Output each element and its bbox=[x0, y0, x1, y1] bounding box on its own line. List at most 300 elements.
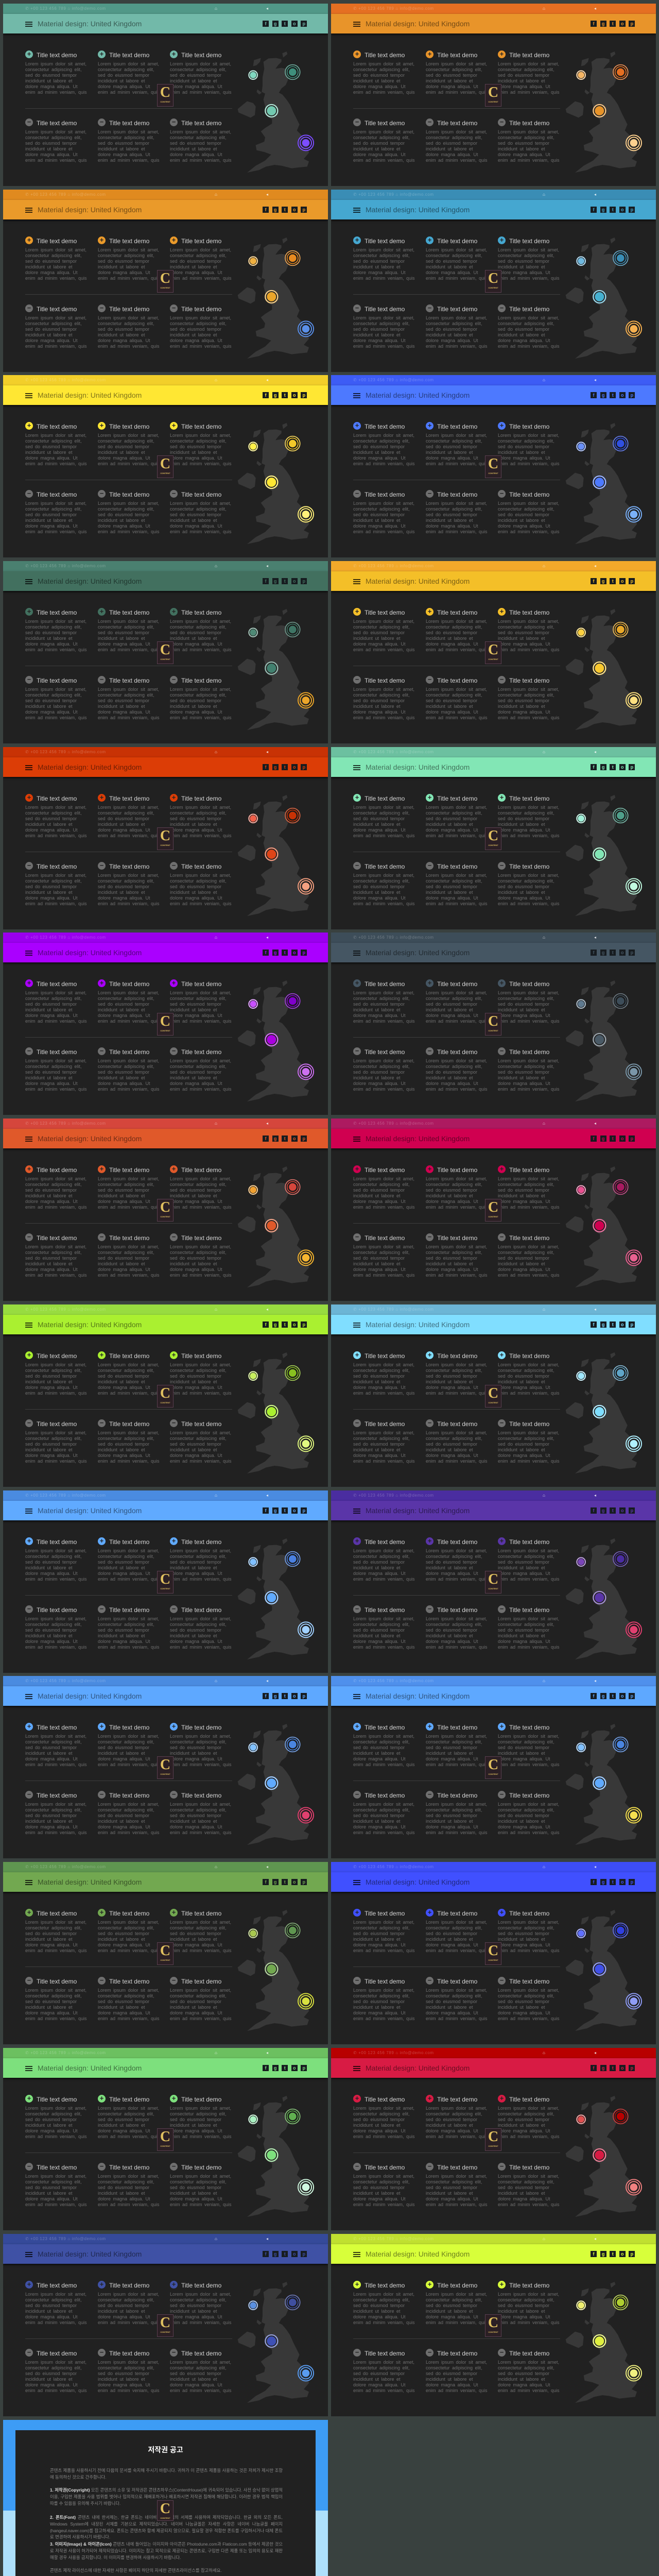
feature 3: incididunt ut labore et bbox=[170, 1007, 217, 1012]
watermark badge: CONTENT bbox=[160, 2331, 170, 2333]
feature 6: dolore magna aliqua. Ut bbox=[170, 1639, 222, 1644]
feature 4: enim ad minim veniam, quis bbox=[25, 1087, 87, 1092]
feature 5: incididunt ut labore et bbox=[426, 1447, 473, 1452]
top contact bar: ◂ bbox=[266, 6, 268, 11]
feature 3: incididunt ut labore et bbox=[170, 1379, 217, 1384]
feature 3: dolore magna aliqua. Ut bbox=[498, 455, 550, 461]
feature 1 bbox=[25, 1909, 88, 1955]
watermark badge: C bbox=[488, 828, 498, 844]
feature 6: consectetur adipiscing elit, bbox=[498, 1807, 554, 1812]
feature 2: + bbox=[428, 2094, 431, 2102]
feature 1: consectetur adipiscing elit, bbox=[353, 996, 410, 1001]
feature 2: Title text demo bbox=[437, 1166, 477, 1174]
feature 5: incididunt ut labore et bbox=[426, 1261, 473, 1266]
header bar with title and social icons: t bbox=[284, 1508, 286, 1513]
feature 1: incididunt ut labore et bbox=[353, 264, 401, 269]
feature 2: consectetur adipiscing elit, bbox=[98, 2111, 154, 2116]
feature 5: − bbox=[100, 118, 103, 126]
header bar with title and social icons: t bbox=[284, 950, 286, 955]
feature 4: − bbox=[27, 304, 31, 312]
feature 5: incididunt ut labore et bbox=[98, 518, 145, 523]
feature 6: incididunt ut labore et bbox=[498, 146, 545, 151]
feature 5: incididunt ut labore et bbox=[426, 704, 473, 709]
feature 5: − bbox=[428, 1419, 431, 1427]
panel: slide 2 orange bbox=[331, 4, 656, 186]
feature 5: consectetur adipiscing elit, bbox=[426, 1993, 482, 1998]
feature 1: + bbox=[355, 979, 359, 987]
feature 1: enim ad minim veniam, quis bbox=[25, 1577, 87, 1582]
watermark badge bbox=[485, 1571, 501, 1594]
feature 2: + bbox=[428, 1908, 431, 1916]
watermark badge: CONTENT bbox=[488, 2145, 498, 2147]
feature 3: enim ad minim veniam, quis bbox=[498, 461, 560, 466]
header bar with title and social icons bbox=[3, 571, 328, 591]
top contact bar: ✆ +00 123 456 789 ⌂ info@demo.com bbox=[25, 192, 106, 197]
feature 5: enim ad minim veniam, quis bbox=[426, 901, 488, 906]
feature 3: incididunt ut labore et bbox=[498, 1379, 545, 1384]
feature 3: dolore magna aliqua. Ut bbox=[498, 2314, 550, 2319]
feature 5 bbox=[426, 1233, 489, 1280]
feature 1: sed do eiusmod tempor bbox=[353, 1374, 405, 1379]
feature 4: consectetur adipiscing elit, bbox=[25, 1064, 82, 1069]
header bar with title and social icons bbox=[331, 385, 656, 405]
feature 5 bbox=[98, 862, 161, 908]
feature 5: sed do eiusmod tempor bbox=[98, 512, 149, 517]
feature 3: sed do eiusmod tempor bbox=[498, 1745, 549, 1750]
feature 2: incididunt ut labore et bbox=[426, 1007, 473, 1012]
feature 3: dolore magna aliqua. Ut bbox=[498, 270, 550, 275]
header bar with title and social icons: f bbox=[265, 1136, 267, 1141]
feature 1: Title text demo bbox=[365, 2096, 405, 2103]
feature 1: incididunt ut labore et bbox=[353, 2123, 401, 2128]
feature 2: incididunt ut labore et bbox=[98, 2123, 145, 2128]
feature 6: dolore magna aliqua. Ut bbox=[170, 2010, 222, 2015]
header bar with title and social icons bbox=[331, 571, 656, 591]
header bar with title and social icons: g bbox=[274, 765, 276, 770]
feature 2: + bbox=[428, 2280, 431, 2288]
feature 2: incididunt ut labore et bbox=[98, 1937, 145, 1942]
feature 1: incididunt ut labore et bbox=[25, 2309, 73, 2314]
feature 4: Lorem ipsum dolor sit amet, bbox=[353, 687, 414, 692]
feature 6: sed do eiusmod tempor bbox=[498, 1628, 549, 1633]
header bar with title and social icons: t bbox=[284, 1136, 286, 1141]
header bar with title and social icons: o bbox=[621, 2251, 624, 2257]
feature 6: Lorem ipsum dolor sit amet, bbox=[170, 315, 231, 320]
top contact bar: ✆ +00 123 456 789 ⌂ info@demo.com bbox=[353, 1679, 434, 1683]
feature 2: enim ad minim veniam, quis bbox=[426, 1577, 488, 1582]
feature 4 bbox=[25, 304, 87, 349]
feature 3: dolore magna aliqua. Ut bbox=[170, 641, 222, 647]
header bar with title and social icons: t bbox=[284, 1322, 286, 1327]
feature 1: incididunt ut labore et bbox=[25, 264, 73, 269]
feature 6: Lorem ipsum dolor sit amet, bbox=[170, 687, 231, 692]
feature 6: consectetur adipiscing elit, bbox=[170, 1064, 227, 1069]
feature 5: Lorem ipsum dolor sit amet, bbox=[426, 315, 487, 320]
feature 1: + bbox=[355, 2094, 359, 2102]
feature 5: consectetur adipiscing elit, bbox=[426, 321, 482, 326]
feature 4: sed do eiusmod tempor bbox=[25, 2371, 77, 2376]
feature 4 bbox=[25, 1047, 88, 1094]
feature 6: sed do eiusmod tempor bbox=[498, 1070, 549, 1075]
feature 2: sed do eiusmod tempor bbox=[426, 1560, 477, 1565]
watermark badge: C bbox=[488, 1571, 498, 1587]
feature 2: dolore magna aliqua. Ut bbox=[98, 2314, 150, 2319]
watermark badge: C bbox=[488, 1013, 498, 1029]
feature 3: consectetur adipiscing elit, bbox=[498, 1182, 554, 1187]
top contact bar: ✆ +00 123 456 789 ⌂ info@demo.com bbox=[25, 378, 106, 382]
feature 5: Lorem ipsum dolor sit amet, bbox=[426, 501, 487, 506]
feature 6 bbox=[498, 304, 560, 349]
top contact bar: ◂ bbox=[594, 2050, 596, 2055]
feature 2: consectetur adipiscing elit, bbox=[426, 810, 482, 816]
feature 3: consectetur adipiscing elit, bbox=[170, 67, 227, 72]
feature 2: Title text demo bbox=[109, 2282, 149, 2289]
feature 3 bbox=[498, 1537, 561, 1584]
feature 4: enim ad minim veniam, quis bbox=[353, 1459, 415, 1464]
feature 4: enim ad minim veniam, quis bbox=[25, 529, 87, 534]
header bar with title and social icons: o bbox=[621, 393, 624, 398]
feature 3: Lorem ipsum dolor sit amet, bbox=[170, 990, 231, 995]
feature 1: sed do eiusmod tempor bbox=[25, 1188, 77, 1193]
panel: slide 4 blue bbox=[331, 190, 656, 372]
top contact bar: ⌂ bbox=[215, 2236, 217, 2241]
feature 6: dolore magna aliqua. Ut bbox=[498, 709, 550, 715]
feature 6: − bbox=[172, 1790, 176, 1798]
watermark badge bbox=[157, 2314, 174, 2337]
feature 5: dolore magna aliqua. Ut bbox=[426, 152, 478, 157]
panel: slide 6 indigo bbox=[331, 375, 656, 557]
feature 1 bbox=[25, 2281, 88, 2327]
header bar with title and social icons: f bbox=[265, 1508, 267, 1513]
feature 2: + bbox=[100, 1908, 103, 1916]
feature 4: dolore magna aliqua. Ut bbox=[25, 709, 78, 715]
feature 6: Lorem ipsum dolor sit amet, bbox=[498, 315, 559, 320]
feature 5: Lorem ipsum dolor sit amet, bbox=[426, 1430, 487, 1435]
feature 5: enim ad minim veniam, quis bbox=[426, 344, 488, 349]
feature 4: − bbox=[355, 489, 359, 497]
feature 2 bbox=[98, 2095, 161, 2141]
feature 2: incididunt ut labore et bbox=[98, 1565, 145, 1570]
feature 4 bbox=[25, 1419, 88, 1466]
feature 3: Title text demo bbox=[509, 1910, 549, 1917]
feature 1: + bbox=[355, 2280, 359, 2288]
feature 3: incididunt ut labore et bbox=[170, 2123, 217, 2128]
feature 5: dolore magna aliqua. Ut bbox=[98, 1453, 150, 1458]
feature 2 bbox=[426, 422, 489, 468]
feature 5: Title text demo bbox=[109, 1234, 149, 1242]
feature 6: incididunt ut labore et bbox=[498, 1819, 545, 1824]
header bar with title and social icons: f bbox=[593, 579, 594, 584]
feature 6: Lorem ipsum dolor sit amet, bbox=[498, 1988, 559, 1993]
feature 1: enim ad minim veniam, quis bbox=[25, 461, 87, 466]
feature 3: incididunt ut labore et bbox=[170, 1937, 217, 1942]
UK map with markers bbox=[206, 1724, 330, 1848]
feature 4: consectetur adipiscing elit, bbox=[353, 1993, 410, 1998]
feature 1: incididunt ut labore et bbox=[353, 1751, 401, 1756]
top contact bar: ◂ bbox=[594, 6, 596, 11]
feature 4: Title text demo bbox=[37, 1048, 77, 1056]
feature 1: sed do eiusmod tempor bbox=[353, 259, 405, 264]
feature 2: Title text demo bbox=[109, 1910, 149, 1917]
feature 3: Lorem ipsum dolor sit amet, bbox=[498, 61, 559, 66]
top contact bar: ✆ +00 123 456 789 ⌂ info@demo.com bbox=[353, 1865, 434, 1869]
feature 4: Title text demo bbox=[365, 1978, 405, 1985]
UK map with markers bbox=[238, 423, 314, 544]
feature 2: dolore magna aliqua. Ut bbox=[98, 1571, 150, 1576]
feature 1 bbox=[25, 421, 87, 466]
feature 6: enim ad minim veniam, quis bbox=[170, 715, 232, 720]
feature 3: incididunt ut labore et bbox=[170, 450, 217, 455]
feature 1: incididunt ut labore et bbox=[353, 450, 401, 455]
header bar with title and social icons: g bbox=[602, 2251, 604, 2257]
feature 3: + bbox=[172, 1537, 176, 1545]
feature 2: enim ad minim veniam, quis bbox=[98, 1205, 160, 1210]
feature 5: consectetur adipiscing elit, bbox=[426, 2365, 482, 2370]
feature 5: consectetur adipiscing elit, bbox=[426, 1807, 482, 1812]
feature 5: incididunt ut labore et bbox=[98, 1447, 145, 1452]
header bar with title and social icons: t bbox=[284, 579, 286, 584]
feature 1: enim ad minim veniam, quis bbox=[25, 1019, 87, 1024]
feature 1: Title text demo bbox=[37, 1538, 77, 1546]
feature 1 bbox=[353, 608, 416, 654]
feature 1: enim ad minim veniam, quis bbox=[353, 833, 415, 838]
feature 1 bbox=[353, 2095, 416, 2141]
watermark badge bbox=[157, 84, 174, 107]
watermark badge: C bbox=[488, 456, 498, 472]
top contact bar bbox=[331, 2048, 656, 2058]
feature 3: enim ad minim veniam, quis bbox=[170, 1948, 232, 1953]
feature 5: sed do eiusmod tempor bbox=[98, 1813, 149, 1818]
feature 4: − bbox=[27, 1976, 31, 1984]
feature 4: incididunt ut labore et bbox=[353, 1633, 401, 1638]
feature 4: incididunt ut labore et bbox=[353, 1447, 401, 1452]
feature 2: dolore magna aliqua. Ut bbox=[98, 1756, 150, 1761]
feature 6: enim ad minim veniam, quis bbox=[170, 2202, 232, 2207]
watermark badge: C bbox=[160, 1385, 170, 1401]
feature 3: Lorem ipsum dolor sit amet, bbox=[498, 619, 559, 624]
feature 4: − bbox=[355, 2348, 359, 2356]
feature 6: incididunt ut labore et bbox=[170, 704, 217, 709]
feature 4: consectetur adipiscing elit, bbox=[353, 1250, 410, 1255]
feature 4: Lorem ipsum dolor sit amet, bbox=[25, 1616, 86, 1621]
feature 6: Title text demo bbox=[509, 2350, 549, 2357]
feature 5: Lorem ipsum dolor sit amet, bbox=[426, 129, 487, 134]
feature 3: Lorem ipsum dolor sit amet, bbox=[498, 1362, 559, 1367]
feature 2: + bbox=[100, 421, 103, 429]
feature 4: consectetur adipiscing elit, bbox=[25, 1807, 82, 1812]
feature 3: sed do eiusmod tempor bbox=[170, 1931, 221, 1936]
feature 6: sed do eiusmod tempor bbox=[170, 2185, 221, 2190]
feature 6: Lorem ipsum dolor sit amet, bbox=[170, 501, 231, 506]
feature 1: consectetur adipiscing elit, bbox=[25, 253, 82, 258]
feature 2: sed do eiusmod tempor bbox=[426, 1931, 477, 1936]
feature 5 bbox=[98, 489, 160, 534]
feature 1: dolore magna aliqua. Ut bbox=[25, 1199, 78, 1204]
feature 4: enim ad minim veniam, quis bbox=[25, 1645, 87, 1650]
feature 6: sed do eiusmod tempor bbox=[170, 1256, 221, 1261]
feature 3: + bbox=[172, 1351, 176, 1359]
watermark badge: C bbox=[160, 828, 170, 844]
feature 2: sed do eiusmod tempor bbox=[98, 1745, 149, 1750]
copyright paragraph: 1. 저작권(Copyright) 모든 콘텐츠의 소유 및 저작권은 콘텐츠하우스(ContentHouse)에 귀속되어 있습니다. 사전 승낙 없이 상업적 이용, 구입한 제품을 사용 범위를 벗어나 임의적으로 재배포하거나 배포하시면 저작권 침해에 해당합니다. 이러한 경우 법적 책임이 따를 수 있음을 유의해 주시기 바랍니다. bbox=[50, 2487, 283, 2506]
feature 3: Title text demo bbox=[181, 1166, 221, 1174]
feature 1: consectetur adipiscing elit, bbox=[353, 1182, 410, 1187]
feature 3: Title text demo bbox=[181, 1352, 221, 1360]
header bar with title and social icons: f bbox=[265, 950, 267, 955]
feature 6: enim ad minim veniam, quis bbox=[498, 1273, 560, 1278]
feature 6: dolore magna aliqua. Ut bbox=[498, 1081, 550, 1086]
header bar with title and social icons: f bbox=[265, 1879, 267, 1885]
feature 6 bbox=[170, 1047, 233, 1094]
feature 4: enim ad minim veniam, quis bbox=[25, 1830, 87, 1835]
feature 6: consectetur adipiscing elit, bbox=[498, 2365, 554, 2370]
feature 3: Lorem ipsum dolor sit amet, bbox=[498, 433, 559, 438]
watermark badge bbox=[157, 827, 174, 850]
watermark badge: C bbox=[160, 2129, 170, 2145]
feature 4: − bbox=[27, 2162, 31, 2170]
feature 4: − bbox=[355, 2162, 359, 2170]
feature 6: incididunt ut labore et bbox=[170, 332, 217, 337]
watermark badge bbox=[485, 2128, 501, 2151]
feature 4: Title text demo bbox=[365, 491, 405, 498]
feature 3: + bbox=[172, 1722, 176, 1730]
feature 3: + bbox=[172, 2094, 176, 2102]
feature 5: Lorem ipsum dolor sit amet, bbox=[426, 1616, 487, 1621]
header bar with title and social icons: p bbox=[631, 1879, 633, 1885]
top contact bar bbox=[3, 2234, 328, 2244]
top contact bar bbox=[3, 190, 328, 200]
feature 5: consectetur adipiscing elit, bbox=[426, 1064, 482, 1069]
header bar with title and social icons: t bbox=[612, 2251, 614, 2257]
feature 4 bbox=[25, 1233, 88, 1280]
feature 3: + bbox=[500, 1351, 504, 1359]
feature 2: consectetur adipiscing elit, bbox=[426, 1739, 482, 1744]
top contact bar: ◂ bbox=[266, 935, 268, 940]
feature 1: consectetur adipiscing elit, bbox=[353, 624, 410, 630]
feature 3: dolore magna aliqua. Ut bbox=[498, 2128, 550, 2133]
feature 6: dolore magna aliqua. Ut bbox=[170, 338, 222, 343]
feature 4: sed do eiusmod tempor bbox=[353, 884, 405, 889]
UK map with markers bbox=[534, 2282, 657, 2405]
feature 3: Title text demo bbox=[181, 1910, 221, 1917]
feature 5: enim ad minim veniam, quis bbox=[98, 1830, 160, 1835]
feature 4: incididunt ut labore et bbox=[353, 890, 401, 895]
feature 2: dolore magna aliqua. Ut bbox=[98, 1942, 150, 1947]
feature 1: incididunt ut labore et bbox=[25, 450, 73, 455]
feature 6: dolore magna aliqua. Ut bbox=[498, 2196, 550, 2201]
feature 1: incididunt ut labore et bbox=[353, 1937, 401, 1942]
feature 2: + bbox=[428, 236, 431, 244]
top contact bar bbox=[331, 375, 656, 385]
feature 3: sed do eiusmod tempor bbox=[170, 73, 221, 78]
feature 2: dolore magna aliqua. Ut bbox=[426, 455, 478, 461]
header bar with title and social icons: p bbox=[631, 21, 633, 26]
header bar with title and social icons: t bbox=[612, 21, 614, 26]
top contact bar bbox=[331, 747, 656, 757]
feature 3: Title text demo bbox=[181, 609, 221, 616]
feature 5: dolore magna aliqua. Ut bbox=[426, 523, 478, 529]
watermark badge bbox=[157, 1942, 174, 1965]
feature 2: incididunt ut labore et bbox=[426, 822, 473, 827]
feature 6: incididunt ut labore et bbox=[498, 2377, 545, 2382]
feature 3: consectetur adipiscing elit, bbox=[498, 810, 554, 816]
feature 5: Lorem ipsum dolor sit amet, bbox=[426, 687, 487, 692]
feature 5: dolore magna aliqua. Ut bbox=[98, 709, 150, 715]
feature 3: Lorem ipsum dolor sit amet, bbox=[170, 61, 231, 66]
feature 6: Lorem ipsum dolor sit amet, bbox=[170, 129, 231, 134]
feature 4: Lorem ipsum dolor sit amet, bbox=[25, 873, 86, 878]
UK map with markers bbox=[534, 1724, 657, 1848]
header bar with title and social icons: p bbox=[631, 393, 633, 398]
top contact bar: ✆ +00 123 456 789 ⌂ info@demo.com bbox=[25, 750, 106, 754]
feature 5 bbox=[426, 1419, 489, 1466]
watermark badge: CONTENT bbox=[488, 2331, 498, 2333]
header bar with title and social icons: p bbox=[631, 207, 633, 212]
feature 4: incididunt ut labore et bbox=[25, 1447, 73, 1452]
header bar with title and social icons: g bbox=[602, 207, 604, 212]
feature 1: incididunt ut labore et bbox=[353, 2309, 401, 2314]
feature 5: dolore magna aliqua. Ut bbox=[426, 895, 478, 901]
feature 2: dolore magna aliqua. Ut bbox=[98, 1013, 150, 1018]
feature 4: dolore magna aliqua. Ut bbox=[25, 1081, 78, 1086]
feature 2: Lorem ipsum dolor sit amet, bbox=[98, 1362, 159, 1367]
feature 3: sed do eiusmod tempor bbox=[498, 1560, 549, 1565]
feature 4 bbox=[353, 676, 416, 722]
feature 6: sed do eiusmod tempor bbox=[170, 698, 221, 703]
feature 1: Lorem ipsum dolor sit amet, bbox=[25, 1548, 86, 1553]
feature 5: − bbox=[100, 1605, 103, 1613]
header bar with title and social icons: g bbox=[602, 579, 604, 584]
feature 1: + bbox=[355, 1908, 359, 1916]
feature 3: consectetur adipiscing elit, bbox=[170, 810, 227, 816]
feature 6: enim ad minim veniam, quis bbox=[170, 901, 232, 906]
feature 3: dolore magna aliqua. Ut bbox=[170, 1571, 222, 1576]
top contact bar: ✆ +00 123 456 789 ⌂ info@demo.com bbox=[353, 1307, 434, 1312]
feature 5: sed do eiusmod tempor bbox=[98, 2371, 149, 2376]
feature 5: Title text demo bbox=[109, 1792, 149, 1799]
feature 4 bbox=[25, 1605, 88, 1652]
header bar with title and social icons: o bbox=[293, 21, 296, 26]
top contact bar bbox=[331, 2234, 656, 2244]
panel: slide 14 crimson bbox=[331, 1118, 656, 1301]
header bar with title and social icons bbox=[331, 2058, 656, 2078]
feature 4: dolore magna aliqua. Ut bbox=[353, 523, 406, 529]
feature 6: Title text demo bbox=[509, 1420, 549, 1428]
panel: slide 11 purple bbox=[3, 933, 328, 1115]
header bar with title and social icons: o bbox=[293, 2065, 296, 2071]
feature 3: Lorem ipsum dolor sit amet, bbox=[170, 1362, 231, 1367]
feature 5: Title text demo bbox=[437, 2350, 477, 2357]
feature 4: Title text demo bbox=[365, 1606, 405, 1614]
watermark badge: C bbox=[488, 270, 498, 286]
top contact bar bbox=[331, 190, 656, 200]
feature 5: enim ad minim veniam, quis bbox=[426, 2202, 488, 2207]
feature 4: sed do eiusmod tempor bbox=[353, 698, 405, 703]
feature 3: consectetur adipiscing elit, bbox=[498, 2297, 554, 2302]
feature 2: Title text demo bbox=[437, 795, 477, 802]
feature 3: sed do eiusmod tempor bbox=[498, 1188, 549, 1193]
feature 2: Title text demo bbox=[109, 423, 149, 430]
feature 5: dolore magna aliqua. Ut bbox=[426, 1639, 478, 1644]
header bar with title and social icons: f bbox=[265, 1693, 267, 1699]
feature 3: Lorem ipsum dolor sit amet, bbox=[170, 247, 231, 252]
feature 3: incididunt ut labore et bbox=[170, 1193, 217, 1198]
feature 2: enim ad minim veniam, quis bbox=[426, 1948, 488, 1953]
feature 2 bbox=[426, 979, 489, 1026]
feature 3: sed do eiusmod tempor bbox=[170, 2117, 221, 2122]
feature 2 bbox=[426, 1351, 489, 1398]
feature 6: consectetur adipiscing elit, bbox=[170, 2179, 227, 2184]
